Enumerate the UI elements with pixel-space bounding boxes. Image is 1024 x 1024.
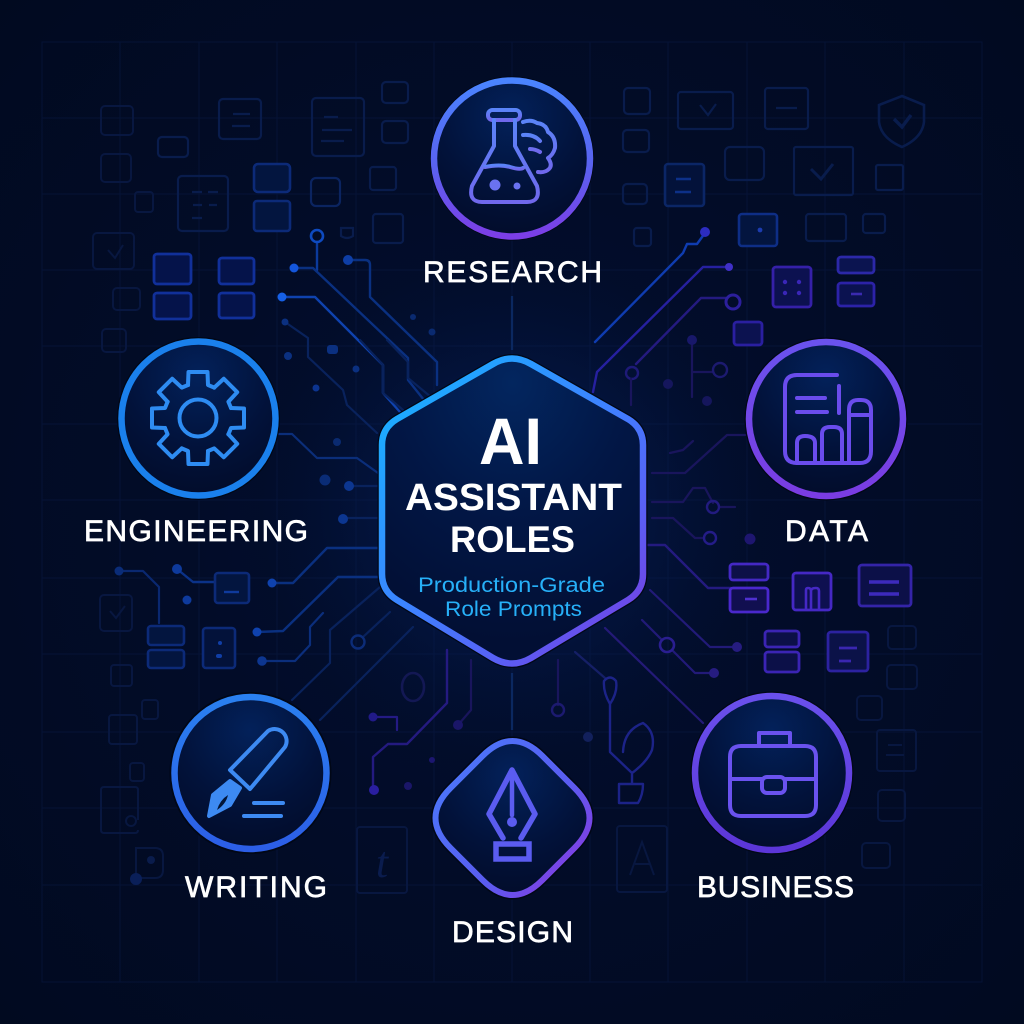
label: data: DATA [785,515,868,548]
boxes and circuits: lower left [114,548,413,720]
role: research [431,78,593,240]
role: engineering [118,338,279,499]
subtitle: Role Prompts [445,597,582,621]
icon: flask with brain [471,110,555,202]
circuit traces: upper right [593,227,740,406]
role: design [436,741,590,895]
purple boxes: lower right [730,564,911,672]
subtitle [418,573,605,621]
label: engineering: ENGINEERING [84,515,308,548]
subtitle: Production-Grade [418,573,605,597]
circuit traces: upper left [278,230,437,446]
icon: briefcase [730,733,816,816]
icon: gear [152,372,244,464]
panel: central hexagon [382,358,643,664]
label: writing: WRITING [185,871,327,904]
circuit traces: left middle [278,434,378,577]
faint background icons: top left [93,82,408,352]
role: business [692,692,852,854]
icon: fountain pen [209,729,287,816]
title: ROLES [450,519,575,560]
label: research: RESEARCH [423,256,602,289]
title: AI [479,404,542,478]
faint background icons: top right [623,88,924,246]
grid boxes: top left [154,164,290,319]
circuits around design tile [368,296,653,803]
label: business: BUSINESS [697,871,854,904]
role: data [746,338,906,500]
purple boxes: top right [734,257,874,345]
circuit traces: right middle [605,435,756,723]
role: writing [170,693,330,853]
faint background icons: lower left [100,595,424,893]
label: design: DESIGN [452,916,573,949]
center glow [262,260,762,760]
faint background icons: lower left: t [376,838,390,887]
title [405,404,622,560]
icon: report and bar chart [785,375,871,463]
icon: pen nib [489,770,535,859]
faint background icons: lower right [617,626,917,892]
title: ASSISTANT [405,477,622,519]
